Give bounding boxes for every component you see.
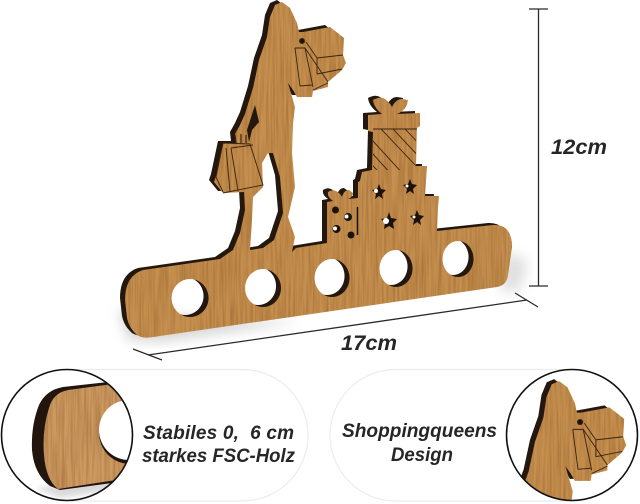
product: wooden shopping queen holder <box>118 0 528 342</box>
ground shadow <box>118 250 528 342</box>
big gift box stripes <box>373 130 416 170</box>
wood front face <box>125 2 512 338</box>
panel: design <box>330 370 638 501</box>
caption: design: Design <box>391 445 453 466</box>
caption: thickness <box>142 423 295 467</box>
caption: design <box>342 421 497 466</box>
small gift dots <box>332 206 358 238</box>
dark side edge <box>120 0 507 336</box>
panel: wood thickness <box>2 370 308 501</box>
inset: figure close-up <box>506 370 638 500</box>
pill outline <box>330 370 636 501</box>
caption: thickness: starkes FSC-Holz <box>142 446 295 467</box>
arm gap detail <box>247 105 259 142</box>
big gift lid line <box>373 128 417 130</box>
label: 17cm: 17cm <box>341 332 397 355</box>
label: 12cm: 12cm <box>551 136 607 159</box>
star cutouts <box>372 179 424 229</box>
dimension: width 17cm <box>133 293 538 360</box>
shopping bags on shoulder lines <box>295 38 343 90</box>
handbag lines <box>216 134 263 193</box>
caption: thickness: Stabiles 0, 6 cm <box>143 423 294 444</box>
caption: design: Shoppingqueens <box>342 421 497 442</box>
pill outline <box>2 370 308 501</box>
dimension: height 12cm <box>529 9 607 286</box>
inset: board edge close-up <box>0 368 134 502</box>
